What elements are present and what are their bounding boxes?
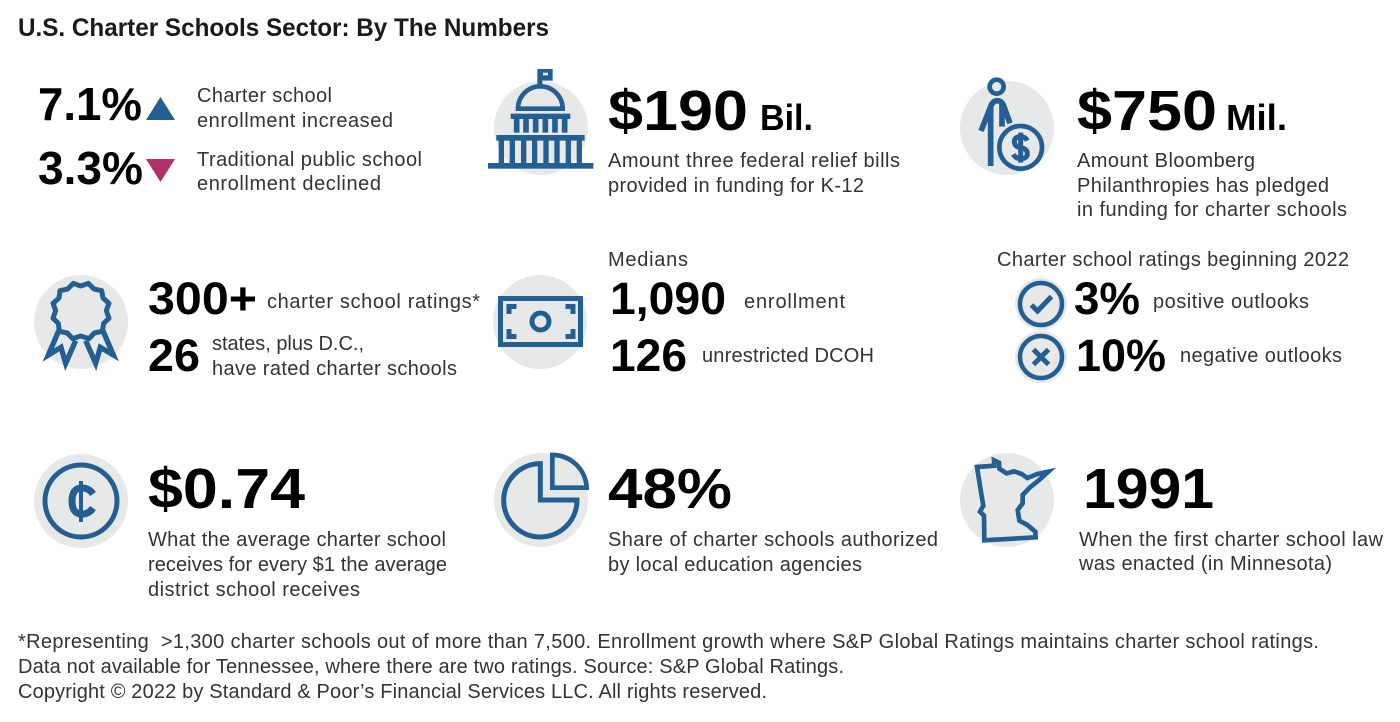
- stat: traditional enrollment down: 3.3%: [38, 142, 143, 194]
- stat: negative outlooks: [1076, 330, 1342, 381]
- text: relief description: [608, 150, 900, 197]
- stat: 26 states: have rated charter schools: [212, 358, 457, 380]
- stat: median enrollment: enrollment: [744, 291, 845, 313]
- panel: federal relief: [488, 69, 900, 197]
- text: traditional enrollment declined: enrollment declined: [197, 173, 381, 195]
- text: authorizers description: by local education agencies: [608, 554, 862, 576]
- heading: medians: Medians: [608, 249, 688, 271]
- icon: Minnesota map: [960, 453, 1054, 547]
- text: charter enrollment increased: enrollment increased: [197, 110, 393, 132]
- footnote: Copyright © 2022 by Standard & Poor’s Financial Services LLC. All rights reserved.: [18, 681, 767, 703]
- stat: positive outlooks: positive outlooks: [1153, 291, 1309, 313]
- text: funding gap description: [148, 529, 447, 601]
- text: charter enrollment increased: [197, 85, 393, 132]
- stat: positive outlooks: [1074, 273, 1309, 324]
- text: first law description: was enacted (in Minnesota): [1078, 553, 1332, 575]
- text: authorizers description: Share of charter schools authorized: [608, 529, 938, 551]
- panel: ratings count: [34, 273, 480, 381]
- footnote: *Representing >1,300 charter schools out of more than 7,500. Enrollment growth where S&P Global Ratings maintains charter school ratings.: [18, 631, 1319, 653]
- panel: enrollment change: [38, 78, 422, 195]
- icon: x mark: [1015, 331, 1067, 383]
- stat: median enrollment: 1,090: [610, 273, 726, 324]
- stat: $750 Mil.: Mil.: [1226, 97, 1287, 138]
- stat: $0.74: $0.74: [148, 457, 305, 521]
- stat: $750 Mil.: $750: [1077, 79, 1217, 143]
- stat: 300+ ratings: charter school ratings*: [267, 291, 480, 313]
- stat: negative outlooks: 10%: [1076, 330, 1166, 381]
- icon: award ribbon: [34, 275, 128, 369]
- text: authorizers description: [608, 529, 938, 576]
- stat: unrestricted DCOH: [610, 330, 874, 381]
- panel: rating outlooks: [997, 249, 1349, 383]
- panel: funding gap: [34, 454, 447, 601]
- text: pledge description: in funding for charter schools: [1077, 199, 1347, 221]
- icon: cent coin: [34, 454, 128, 548]
- panel: medians: [493, 249, 874, 381]
- text: pledge description: Philanthropies has pledged: [1077, 175, 1329, 197]
- stat: 48%: 48%: [608, 457, 732, 521]
- stat: 300+ ratings: 300+: [148, 273, 257, 324]
- text: relief description: Amount three federal relief bills: [608, 150, 900, 172]
- footnote: [18, 631, 1319, 703]
- text: first law description: [1078, 529, 1384, 575]
- text: pledge description: Amount Bloomberg: [1077, 150, 1255, 172]
- icon: capitol building: [488, 69, 593, 175]
- text: traditional enrollment declined: [197, 149, 422, 195]
- icon: up triangle: [146, 97, 175, 120]
- footnote: Data not available for Tennessee, where there are two ratings. Source: S&P Global Ratings.: [18, 656, 844, 678]
- stat: positive outlooks: 3%: [1074, 273, 1140, 324]
- stat: 300+ ratings: [148, 273, 480, 324]
- text: first law description: When the first charter school law: [1079, 529, 1384, 551]
- text: funding gap description: district school receives: [148, 579, 360, 601]
- text: pledge description: [1077, 150, 1347, 221]
- panel: first law: [960, 453, 1384, 575]
- stat: 1991: 1991: [1083, 457, 1214, 521]
- stat: 26 states: 26: [148, 330, 200, 381]
- text: charter enrollment increased: Charter school: [197, 85, 332, 107]
- stat: $190 Bil.: Bil.: [760, 97, 813, 138]
- panel: authorizers: [494, 453, 938, 576]
- stat: 26 states: states, plus D.C.,: [212, 333, 364, 355]
- icon: check mark: [1015, 278, 1067, 330]
- text: traditional enrollment declined: Traditional public school: [197, 149, 422, 171]
- stat: charter enrollment up: 7.1%: [38, 78, 142, 130]
- icon: down triangle: [146, 159, 175, 182]
- heading: outlooks: Charter school ratings beginning 2022: [997, 249, 1349, 271]
- text: funding gap description: What the average charter school: [148, 529, 446, 551]
- stat: $190 Bil.: [608, 79, 813, 143]
- panel: Bloomberg pledge: [960, 79, 1347, 221]
- stat: median enrollment: [610, 273, 845, 324]
- stat: unrestricted DCOH: unrestricted DCOH: [702, 345, 874, 367]
- icon: banknote: [493, 275, 587, 369]
- title: U.S. Charter Schools Sector: By The Numbers: [18, 14, 549, 42]
- text: funding gap description: receives for every $1 the average: [148, 554, 447, 576]
- stat: $190 Bil.: $190: [608, 79, 748, 143]
- stat: negative outlooks: negative outlooks: [1180, 345, 1342, 367]
- stat: unrestricted DCOH: 126: [610, 330, 687, 381]
- icon: person with dollar coin: [960, 80, 1054, 175]
- stat: $750 Mil.: [1077, 79, 1287, 143]
- icon: pie chart: [494, 453, 588, 547]
- stat: 26 states: [148, 330, 457, 381]
- text: relief description: provided in funding for K-12: [608, 175, 864, 197]
